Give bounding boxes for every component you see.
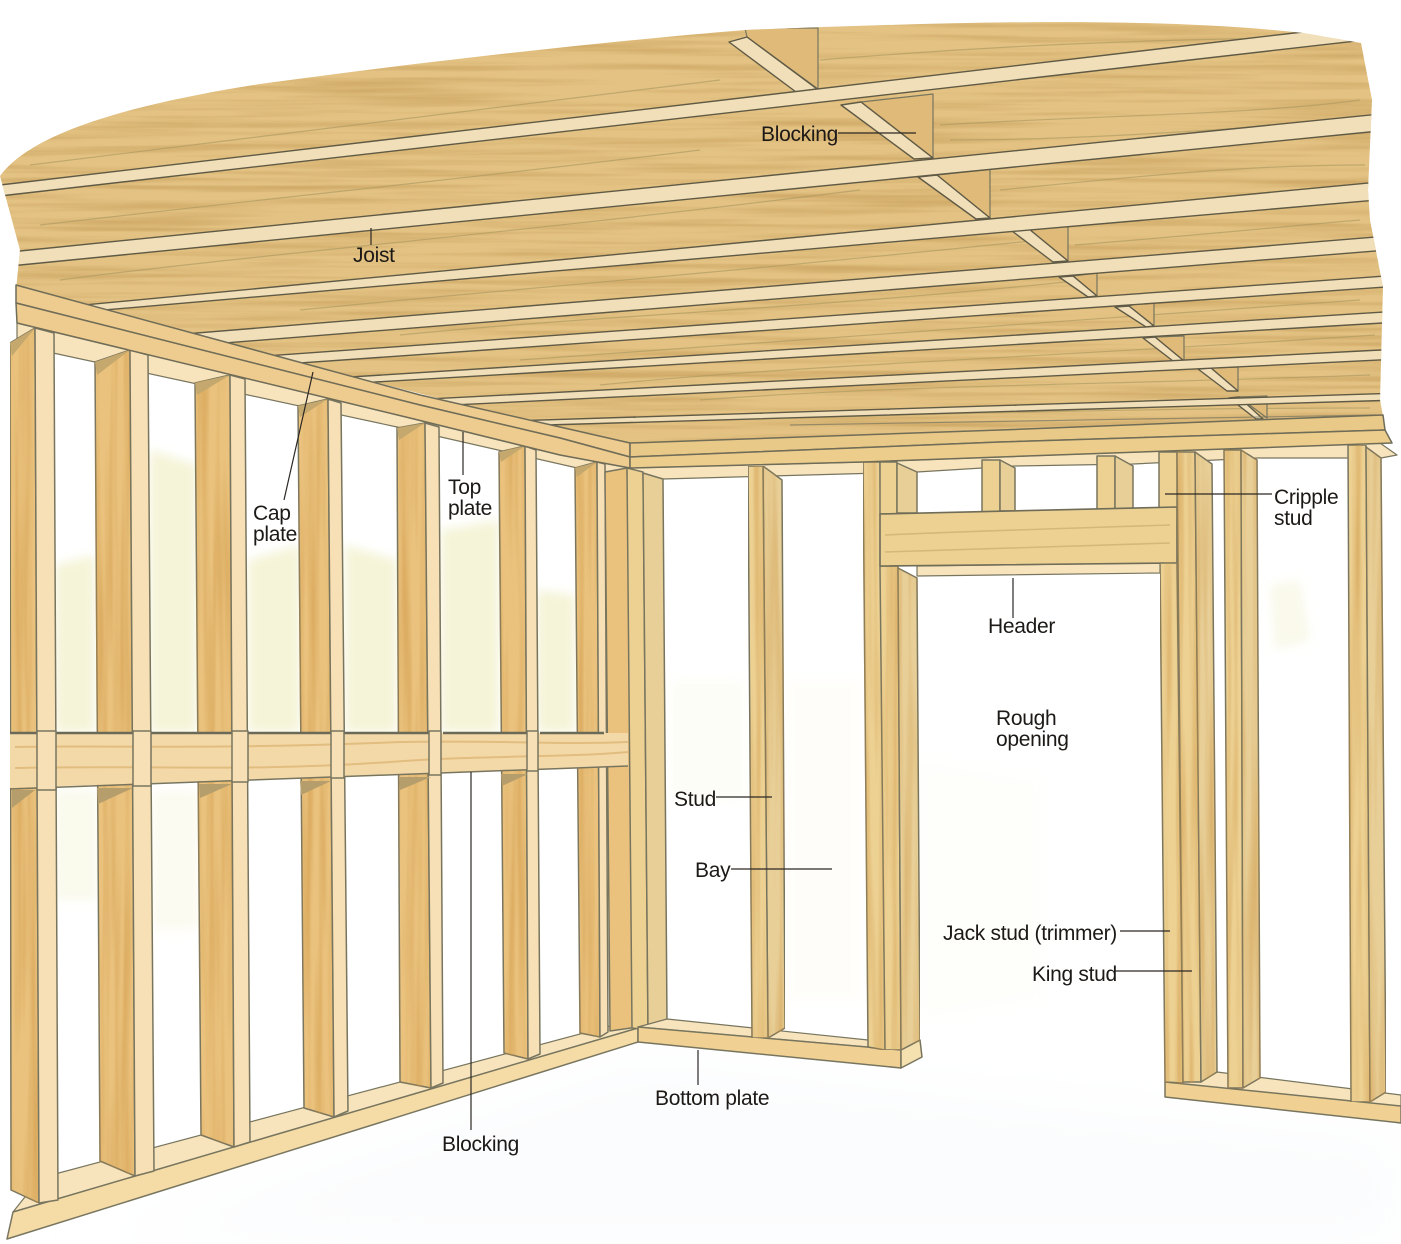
label: Header [988,578,1055,638]
label: Cap plate: Cap [253,502,291,525]
door left studs [863,462,920,1050]
cripple studs [880,452,1177,514]
label: Blocking upper: Blocking [761,123,838,146]
label: Bay [695,859,832,882]
label: Rough opening [996,707,1069,751]
label: Jack stud: Jack stud (trimmer) [943,922,1117,945]
left stud sides [10,328,600,1203]
label: Cripple stud: Cripple [1274,486,1338,509]
label: Rough opening: opening [996,728,1069,751]
centre bottom plate [638,1019,922,1068]
label: Stud: Stud [674,788,716,811]
rim joist line [790,415,1376,425]
label: Bottom plate: Bottom plate [655,1087,769,1110]
middle stud [748,466,785,1038]
left stud fronts [35,328,608,1203]
left blocking [10,731,628,808]
left bottom plate [7,1018,640,1239]
label: Cripple stud: stud [1274,507,1312,530]
left cap and top plates [16,285,630,468]
wood grain lines [30,38,1375,418]
label: Joist: Joist [353,244,395,267]
stud fronts over blocking [37,731,538,790]
label: Blocking lower: Blocking [442,1133,519,1156]
label: Cripple stud [1165,486,1338,530]
label: Cap plate [253,372,313,546]
label: King stud: King stud [1032,963,1117,986]
label: Cap plate: plate [253,523,297,546]
label: Header: Header [988,615,1055,638]
blocking pieces [745,28,1267,418]
ceiling joists [0,0,1401,460]
label: Top plate: plate [448,497,492,520]
label: Joist [353,228,395,267]
right jack and king studs [1160,445,1386,1102]
label: Bay: Bay [695,859,731,882]
watercolor wash [55,450,1310,1020]
stud shading [10,328,597,477]
label: Rough opening: Rough [996,707,1056,730]
right wall [630,415,1401,1123]
left wall [7,285,667,1239]
label: Top plate: Top [448,476,481,499]
label: Bottom plate [655,1050,769,1110]
right bottom plate [1165,1072,1401,1123]
plate underside bands [17,323,1397,480]
corner studs [605,468,667,1031]
diagonal blocking strips [729,37,1263,419]
floor tint [100,1060,1401,1244]
header [880,507,1177,576]
shaded stud tops under blocking [12,774,528,808]
right top plates [630,415,1392,468]
ceiling surface [0,0,1401,460]
label: Stud [674,788,772,811]
joist strips [0,22,1400,441]
label: Top plate [448,432,492,520]
